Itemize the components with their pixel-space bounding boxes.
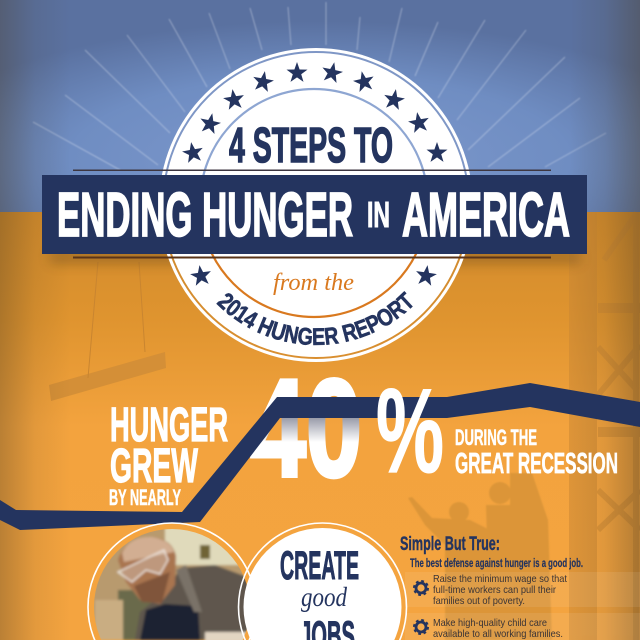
orange ground background — [0, 212, 640, 640]
bullet text 1: Raise the minimum wage so that — [433, 573, 567, 585]
title banner — [42, 175, 587, 254]
badge circle — [162, 48, 470, 362]
sun rays — [33, 2, 606, 170]
panel: simple but true — [400, 534, 640, 640]
bullet text 1: full-time workers can pull their — [433, 584, 556, 596]
stat text left: BY NEARLY — [109, 485, 181, 510]
sky background — [0, 0, 640, 212]
stat text right — [455, 425, 618, 480]
stat text right: DURING THE — [455, 425, 537, 450]
bottom stars — [189, 264, 438, 286]
banner shadow on ground — [50, 250, 580, 264]
background silhouette: hanging beam — [49, 262, 166, 401]
create good jobs circle: CREATE — [280, 544, 359, 588]
stat text left: HUNGER — [110, 399, 228, 452]
bullet text 2: available to all working families. — [433, 628, 563, 640]
text: from the: from the — [273, 270, 354, 296]
photo ring — [88, 523, 256, 640]
icon: gear 1 — [414, 581, 428, 595]
photo: worker with safety glasses — [94, 529, 247, 640]
highlight bands — [405, 572, 640, 640]
percent sign: % — [376, 364, 444, 498]
head — [118, 537, 176, 604]
inner ring — [200, 89, 428, 317]
title text: IN — [367, 194, 390, 235]
title text: ENDING HUNGER — [57, 181, 353, 250]
icon: gear 2 — [414, 620, 428, 634]
bullet text 1 — [433, 573, 567, 607]
big number: 40: 40 — [250, 351, 362, 506]
curved text: 2014 hunger report: 2014 HUNGER REPORT — [216, 291, 413, 346]
text: good: good — [301, 582, 347, 612]
worktable — [205, 632, 255, 640]
stat text left: GREW — [110, 440, 198, 493]
create good jobs circle — [238, 523, 406, 640]
glasses — [118, 550, 168, 582]
trend line — [0, 383, 640, 530]
background silhouette: workers — [408, 473, 552, 640]
bullet text 1: families out of poverty. — [433, 595, 525, 607]
bullet text 2 — [433, 617, 563, 640]
background silhouette: scaffold tower — [583, 212, 640, 640]
rules above and below banner — [73, 170, 551, 258]
shirt — [135, 565, 255, 640]
top arc of stars — [181, 60, 448, 164]
bullet text 2: Make high-quality child care — [433, 617, 547, 629]
stat text left — [109, 399, 228, 510]
heading: 4 steps to: 4 STEPS TO — [229, 119, 393, 173]
panel heading: Simple But True: — [400, 534, 500, 555]
